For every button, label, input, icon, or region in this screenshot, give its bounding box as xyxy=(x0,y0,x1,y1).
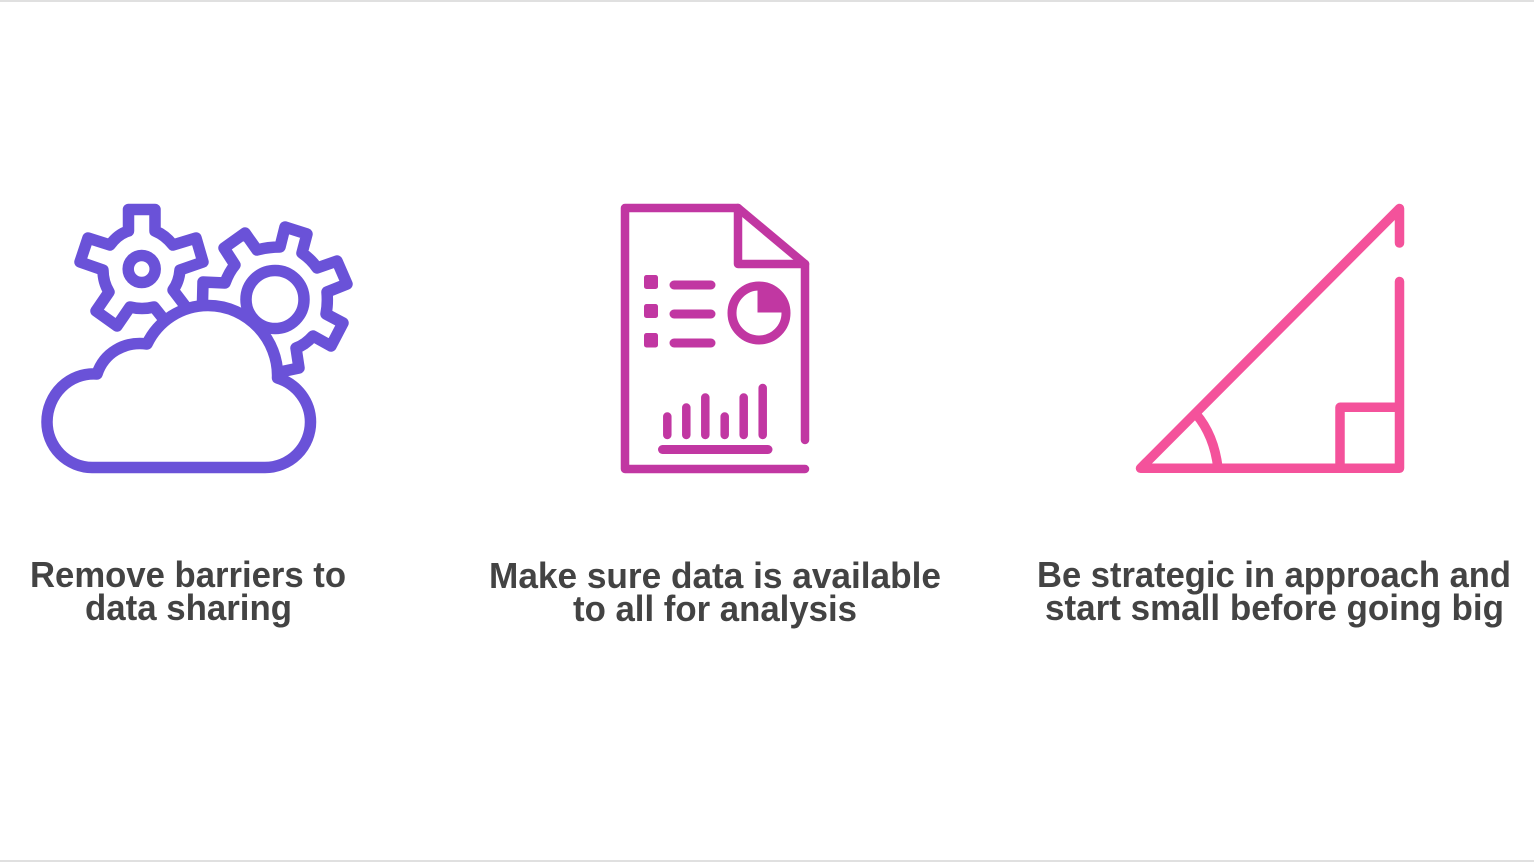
right angle square xyxy=(1340,407,1399,468)
text: make data available: Make sure data is available xyxy=(489,555,941,596)
page outline xyxy=(625,208,805,469)
pie chart xyxy=(732,285,786,340)
left gear hub xyxy=(128,256,155,282)
right gear xyxy=(202,227,347,372)
text: make data available: to all for analysis xyxy=(573,588,857,629)
triangle outline xyxy=(1140,208,1400,468)
right gear hub xyxy=(246,270,304,328)
text: be strategic: Be strategic in approach and xyxy=(1037,554,1511,595)
list bullets xyxy=(644,275,658,348)
angle arc xyxy=(1196,414,1218,468)
icon: document with charts xyxy=(625,208,805,469)
text: remove barriers: Remove barriers to xyxy=(30,554,346,595)
icon: cloud with gears xyxy=(47,210,347,468)
chart baseline xyxy=(662,445,768,454)
icon: right triangle xyxy=(1140,208,1400,468)
cloud outline xyxy=(47,306,310,468)
list lines xyxy=(674,285,711,343)
text: remove barriers: data sharing xyxy=(85,587,292,628)
bar chart xyxy=(667,388,763,435)
text: be strategic: start small before going big xyxy=(1045,587,1504,628)
page fold xyxy=(738,208,805,264)
left gear xyxy=(80,210,203,326)
